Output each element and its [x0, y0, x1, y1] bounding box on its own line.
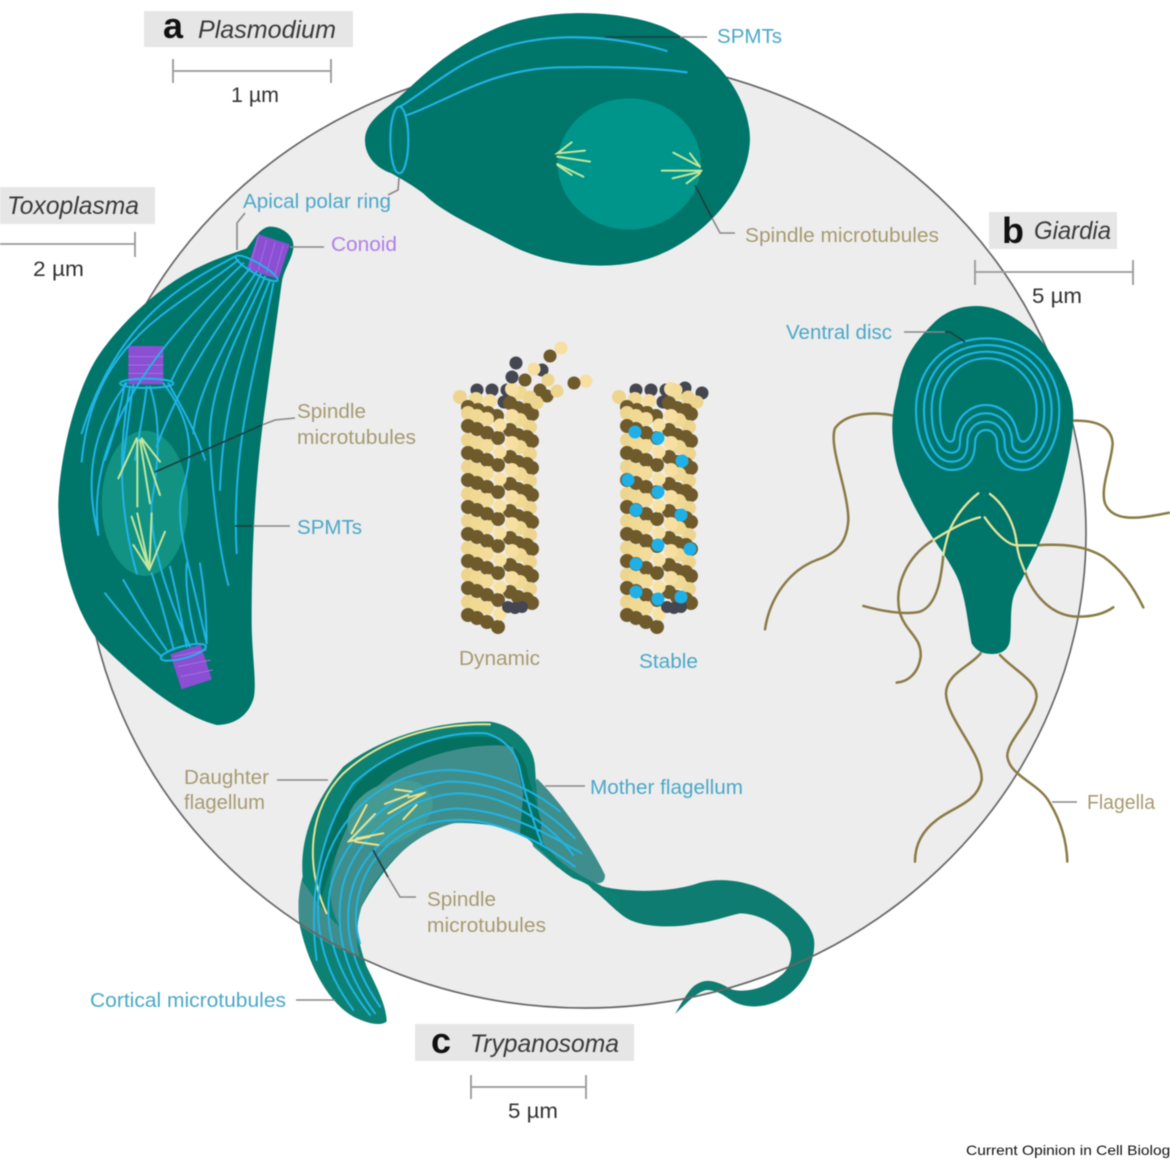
translucent region beside flagellum: [527, 778, 605, 883]
label: spindle microtubules Trypanosoma: Spindle: [427, 889, 496, 911]
label: spindle microtubules Trypanosoma: microtubules: [427, 915, 546, 937]
organism: Toxoplasma cell: [58, 227, 293, 725]
microtubule: dynamic: [453, 342, 592, 634]
body: [892, 306, 1073, 654]
label: daughter flagellum: Daughter: [184, 767, 269, 789]
label: flagella: Flagella: [1087, 792, 1156, 814]
label: spindle microtubules Trypanosoma: [427, 889, 546, 937]
label: stable: Stable: [639, 651, 698, 673]
scale bar: 1 µm: 1 µm: [231, 84, 279, 107]
heading: a Plasmodium: a: [163, 5, 184, 46]
heading: b Giardia: [989, 210, 1117, 251]
internal flagella: [933, 493, 1036, 572]
circle outline: [84, 58, 1086, 1008]
label: SPMTs Plasmodium: SPMTs: [717, 26, 782, 48]
heading: Toxoplasma: Toxoplasma: [7, 192, 139, 220]
apical ring and SPMTs: [390, 37, 687, 173]
organism: Giardia cell: [765, 306, 1170, 862]
heading: c Trypanosoma: c: [431, 1020, 451, 1061]
daughter flagellum: [313, 724, 490, 913]
scale bar: 1 µm: [173, 59, 331, 107]
spindle: [557, 142, 702, 183]
background circle: [84, 58, 1086, 1008]
scale bar: 2 µm: 2 µm: [33, 258, 84, 281]
conoids: [128, 234, 290, 689]
label: mother flagellum: Mother flagellum: [590, 777, 743, 799]
scale bar: 5 µm Trypanosoma: 5 µm: [508, 1100, 558, 1123]
heading: a Plasmodium: [144, 5, 353, 47]
label: daughter flagellum: [184, 767, 269, 814]
label: apical polar ring: Apical polar ring: [243, 191, 391, 213]
label: conoid: Conoid: [331, 234, 397, 256]
ventral disc: [916, 338, 1059, 470]
spindle microtubules: [348, 789, 425, 845]
body: [58, 227, 293, 725]
heading: b Giardia: Giardia: [1034, 217, 1111, 245]
body: [365, 13, 750, 266]
label: spindle microtubules Toxoplasma: [297, 401, 416, 449]
translucent cell region: [299, 745, 523, 957]
flagella: [765, 414, 1170, 862]
heading: Toxoplasma: [0, 187, 155, 224]
scale bar: 2 µm: [0, 232, 135, 281]
nucleus: [558, 98, 701, 230]
heading: c Trypanosoma: Trypanosoma: [470, 1030, 619, 1058]
nucleus: [337, 767, 443, 860]
nucleus: [102, 431, 188, 576]
label: ventral disc: Ventral disc: [786, 322, 892, 344]
leader lines: [155, 37, 1077, 1000]
scale bar: 5 µm Giardia: 5 µm: [1032, 285, 1082, 308]
dark crescent: [320, 737, 542, 897]
SPMTs and rings: [82, 252, 280, 664]
heading: b Giardia: b: [1002, 210, 1024, 251]
credit: Current Opinion in Cell Biology: [966, 1143, 1170, 1158]
label: daughter flagellum: flagellum: [184, 792, 265, 814]
organism: Trypanosoma cell: [299, 722, 814, 1024]
spindle: [118, 438, 165, 570]
label: cortical microtubules: Cortical microtubules: [90, 990, 286, 1012]
label: spindle microtubules Plasmodium: Spindle microtubules: [745, 225, 939, 247]
body: [299, 722, 620, 1024]
heading: c Trypanosoma: [415, 1020, 634, 1061]
scale bar: 5 µm Trypanosoma: [471, 1075, 586, 1123]
heading: a Plasmodium: Plasmodium: [198, 16, 336, 44]
organism: Plasmodium cell: [365, 13, 750, 266]
microtubule: stable: [612, 382, 708, 634]
label: spindle microtubules Toxoplasma: Spindle: [297, 401, 366, 423]
label: dynamic: Dynamic: [459, 648, 540, 670]
label: spindle microtubules Toxoplasma: microtubules: [297, 427, 416, 449]
cortical microtubules: [314, 733, 582, 1015]
scale bar: 5 µm Giardia: [975, 260, 1133, 308]
label: SPMTs Toxoplasma: SPMTs: [297, 517, 362, 539]
flagellated tail: [580, 877, 814, 1014]
